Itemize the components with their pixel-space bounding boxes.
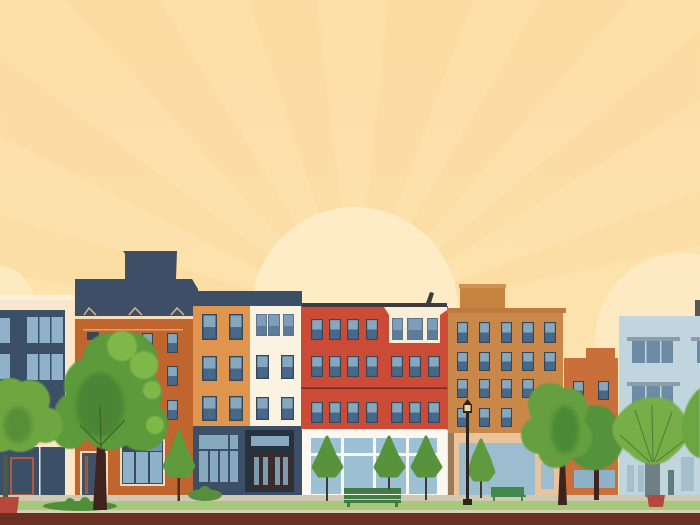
trees: three cypress along storefront [313,437,441,501]
tree: far right edge [682,388,700,458]
right hill sun [595,253,700,427]
sun rays [0,0,700,320]
left hill sun [0,265,35,345]
building: tan brick with chimney [447,284,566,498]
building: small orange [564,348,618,497]
bench: large [344,488,401,507]
street lamp [463,399,472,505]
tree: fan-shaped with pot [612,397,689,507]
shrub left [43,497,117,511]
building: orange and cream with navy shopfront [193,291,302,495]
tree: right foreground [521,383,592,505]
tree: big foreground [53,331,168,510]
tree: far left with pot [0,378,63,513]
building: navy roofed orange-brown [75,251,198,497]
bench: small [491,487,526,501]
building: left cream and navy [0,295,74,497]
tree: small cypress by brown building [164,431,194,501]
shrub centre [188,486,222,501]
building: pale blue [619,300,700,498]
tree: cypress by tan building [469,440,494,498]
tree: second green behind [567,405,624,500]
ground: pavement, grass, kerb and soil [0,495,700,525]
rising sun [252,207,458,413]
building: red brick with white shopfront [301,292,448,498]
